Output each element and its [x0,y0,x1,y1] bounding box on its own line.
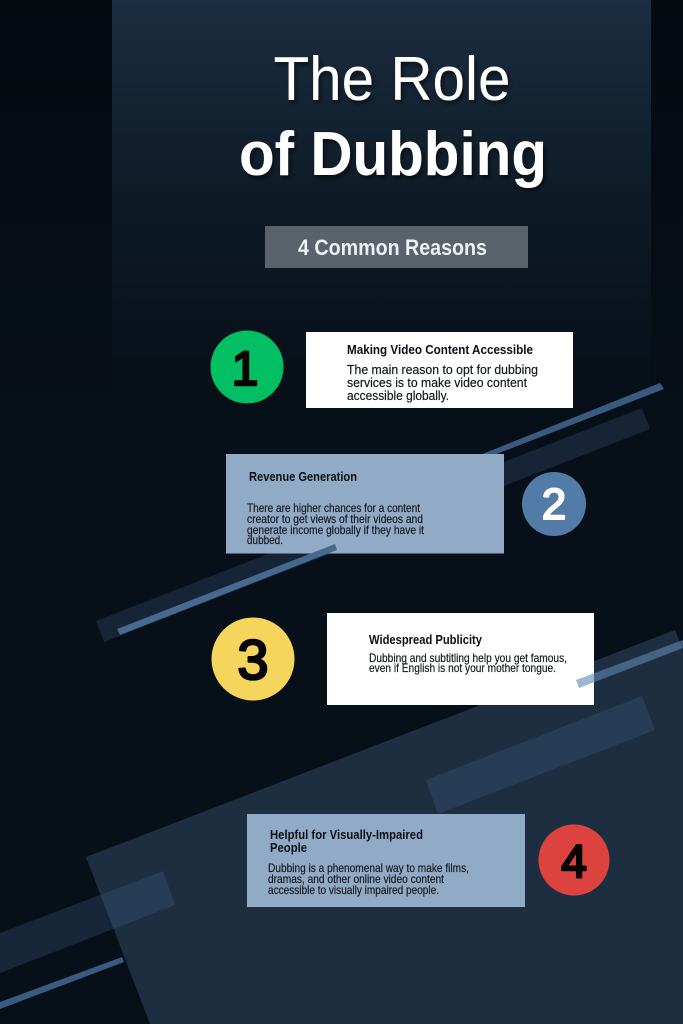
reason 1 card: Making Video Content Accessible [347,342,533,357]
reason 2 number [522,472,586,536]
reason 3 card [327,613,594,705]
reason 3 number: 3 [237,628,269,691]
reason 4 card: dramas, and other online video content [268,873,445,886]
decorative band: inside large panel [426,696,655,814]
reason 1 card: accessible globally. [347,389,449,403]
reason 2 card: creator to get views of their videos and [247,513,423,526]
reason 2 card: Revenue Generation [249,469,357,484]
title [239,45,547,189]
decorative large slanted panel [86,630,683,1024]
reason 4 card: Helpful for Visually-Impaired [270,827,423,842]
reason 1 card: The main reason to opt for dubbing [347,363,538,377]
reason 3 card: even if English is not your mother tongue. [369,662,556,675]
reason 1 number: 1 [232,343,258,396]
reason 4 number [538,824,610,896]
subtitle badge [265,226,528,268]
decorative line: upper right [480,383,664,455]
decorative band: bottom left [0,871,175,973]
reason 2 card: dubbed. [247,534,283,547]
decorative band: middle [96,408,650,642]
reason 2 card: generate income globally if they have it [247,524,425,537]
reason 2 card: There are higher chances for a content [247,502,421,515]
reason 3 card: Dubbing and subtitling help you get famous, [369,652,567,665]
reason 4 card: People [270,840,307,855]
title: of Dubbing [239,120,547,189]
reason 2 number: 2 [542,480,566,529]
reason 1 card: services is to make video content [347,376,527,390]
reason 4 card: accessible to visually impaired people. [268,884,439,897]
reason 4 card [247,814,525,907]
title: The Role [274,45,510,114]
decorative line: lower left [0,957,124,1009]
reason 3 card: Widespread Publicity [369,632,483,647]
reason 1 number [210,330,284,404]
header panel [112,0,651,400]
decorative line: right [576,640,683,688]
reason 1 card [306,332,573,408]
reason 2 card [226,454,504,554]
reason 3 number [212,618,294,700]
reason 4 card: Dubbing is a phenomenal way to make films, [268,862,469,875]
reason 4 number: 4 [561,835,587,887]
subtitle badge: 4 Common Reasons [298,235,487,260]
decorative line: lower middle [117,544,337,635]
